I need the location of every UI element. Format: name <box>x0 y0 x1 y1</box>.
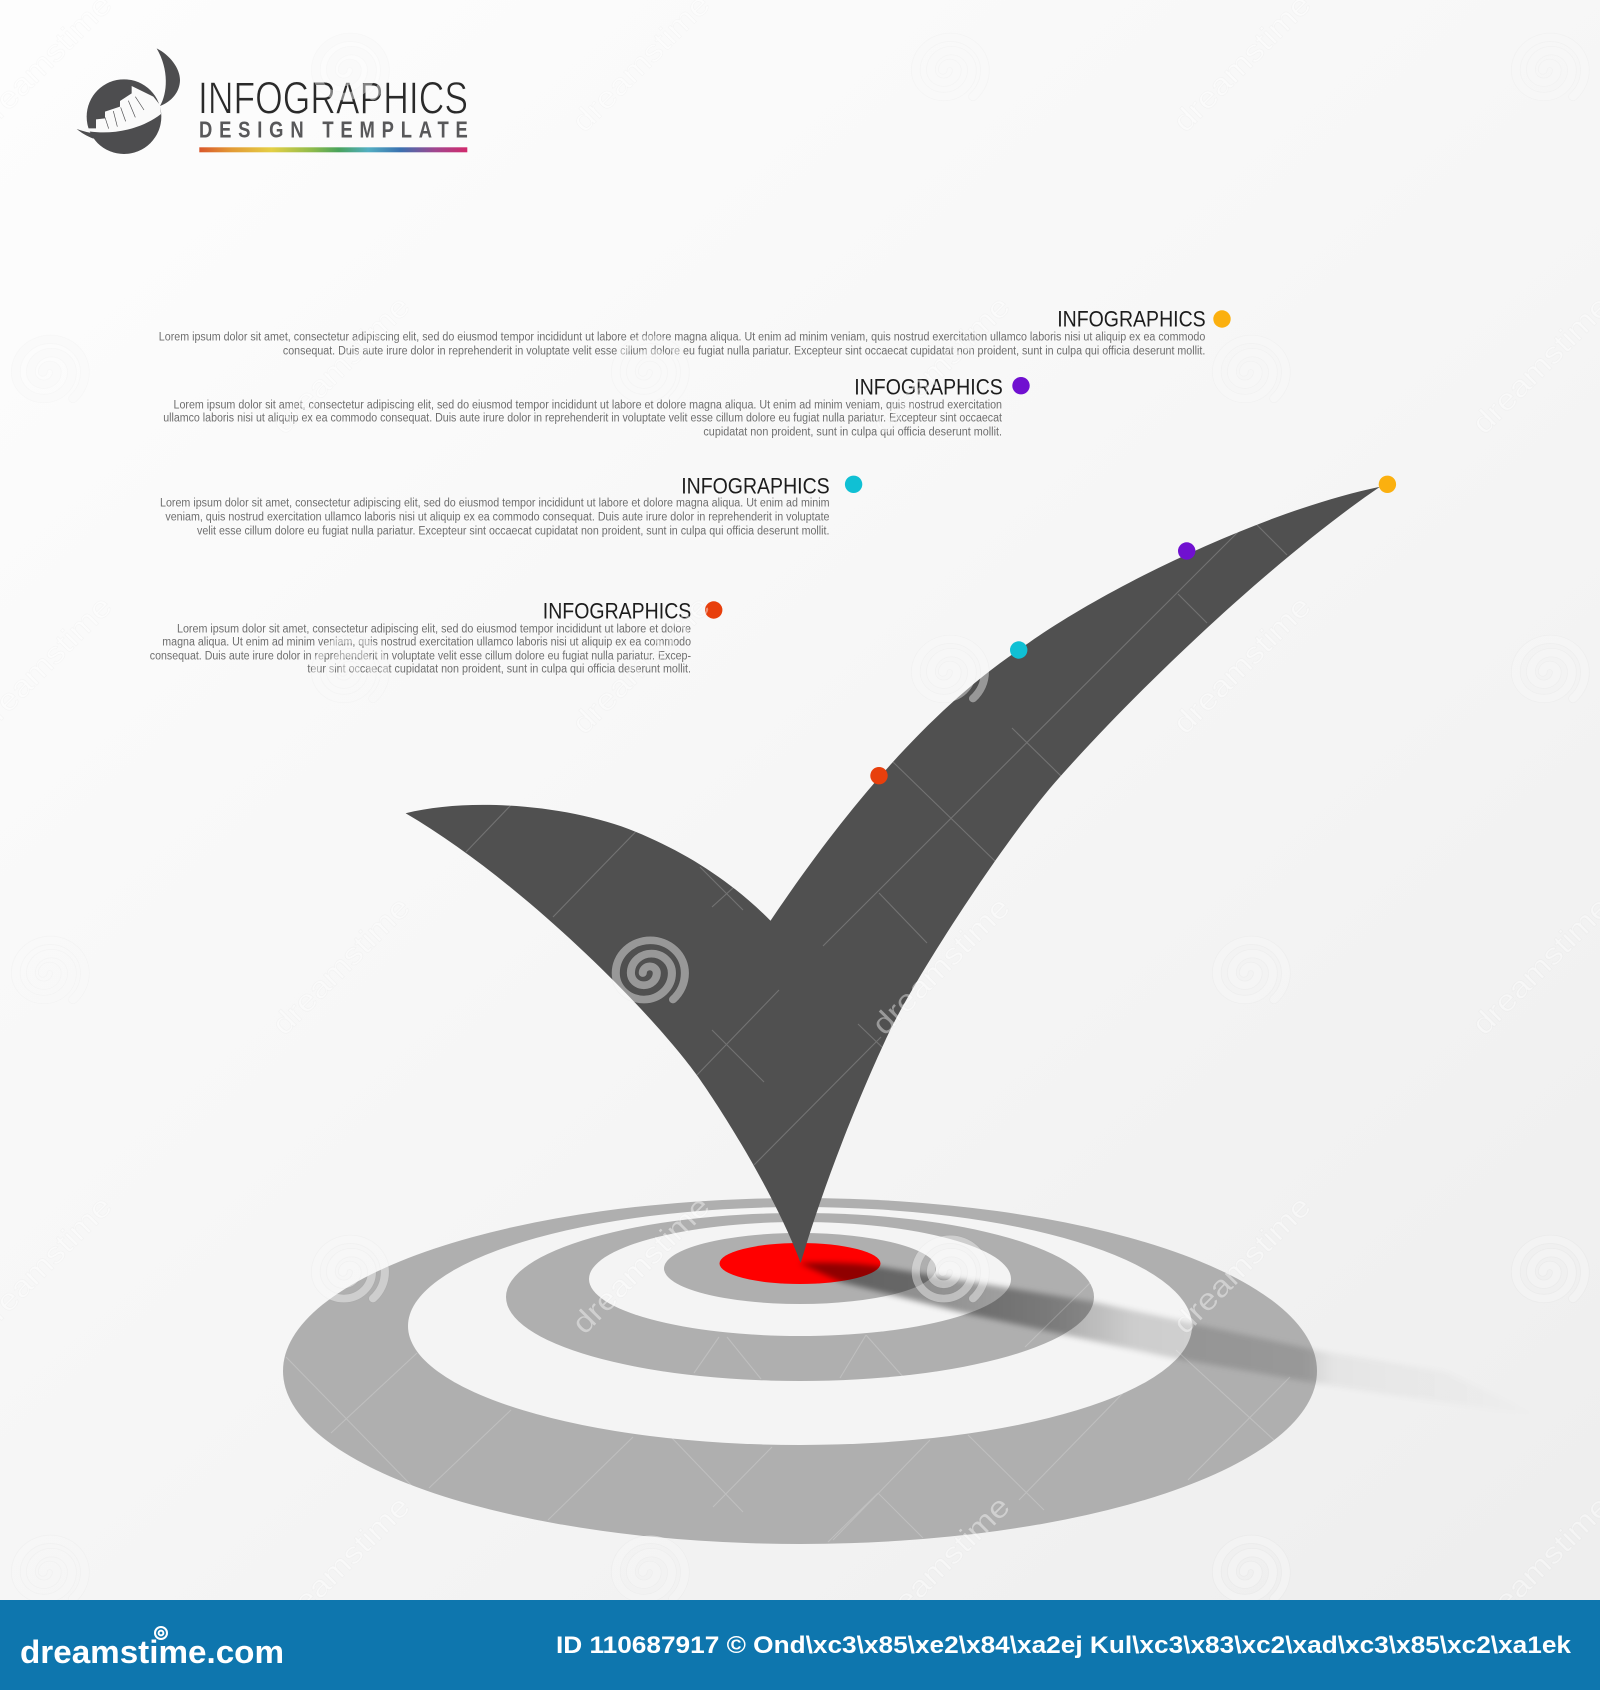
watermark wordmarks: dreamstime <box>266 891 417 1042</box>
label 2: purple <box>163 374 1030 439</box>
cast shadow of check mark <box>799 1263 1543 1417</box>
label 2: purple: ullamco laboris nisi ut aliquip ex ea commodo consequat. Duis aute irure dolor in reprehenderit in voluptate velit esse cillum dolore eu fugiat nulla pariatur. Excepteur sint occaecat <box>163 413 1003 425</box>
footer spiral icon <box>155 1627 167 1639</box>
label 3: teal <box>160 473 862 537</box>
footer image id: ID 110687917 © Ond\xc3\x85\xe2\x84\xa2ej Kul\xc3\x83\xc2\xad\xc3\x85\xc2\xa1ek <box>556 1632 1572 1659</box>
watermark wordmarks: dreamstime <box>266 290 417 441</box>
watermark wordmarks: dreamstime <box>566 590 717 741</box>
logo title <box>198 72 468 143</box>
rainbow underline <box>199 147 467 152</box>
watermark wordmarks: dreamstime <box>866 891 1017 1042</box>
label 1: yellow <box>159 307 1231 357</box>
logo title: DESIGN TEMPLATE <box>199 117 468 143</box>
watermark lines <box>286 523 1290 1542</box>
label 1: yellow: INFOGRAPHICS <box>1057 307 1206 332</box>
label 4: red: INFOGRAPHICS <box>543 598 691 623</box>
label 4: red <box>150 598 722 676</box>
label 2: purple: cupidatat non proident, sunt in culpa qui officia deserunt mollit. <box>703 427 1002 439</box>
watermark wordmarks: dreamstime <box>1466 290 1600 441</box>
watermark wordmarks: dreamstime <box>866 1490 1017 1641</box>
label 2: purple: INFOGRAPHICS <box>854 374 1003 399</box>
logo icon <box>77 48 180 154</box>
watermark wordmarks: dreamstime <box>1167 590 1318 741</box>
watermark wordmarks: dreamstime <box>566 0 717 139</box>
label 4: red: magna aliqua. Ut enim ad minim veniam, quis nostrud exercitation ullamco laboris nisi ut aliquip ex ea commodo <box>162 637 691 649</box>
watermark wordmarks: dreamstime <box>1167 1190 1318 1341</box>
watermark wordmarks: dreamstime <box>1466 1490 1600 1641</box>
label 3: teal: velit esse cillum dolore eu fugiat nulla pariatur. Excepteur sint occaecat cupidatat non proident, sunt in culpa qui officia deserunt mollit. <box>197 525 830 537</box>
watermark wordmarks: dreamstime <box>266 1490 417 1641</box>
label 4: red: teur sint occaecat cupidatat non proident, sunt in culpa qui officia deserunt mollit. <box>307 664 691 676</box>
label 1: yellow: consequat. Duis aute irure dolor in reprehenderit in voluptate velit esse cillum dolore eu fugiat nulla pariatur. Excepteur sint occaecat cupidatat non proident, sunt in culpa qui officia deserunt mollit. <box>283 345 1205 357</box>
watermark wordmarks: dreamstime <box>1466 891 1600 1042</box>
bullseye <box>720 1243 880 1284</box>
label 4: red: consequat. Duis aute irure dolor in reprehenderit in voluptate velit esse cillum dolore eu fugiat nulla pariatur. Excep- <box>150 650 691 662</box>
footer logo text: dreamstime.com <box>20 1634 284 1670</box>
watermark wordmarks: dreamstime <box>1167 0 1318 139</box>
label 3: teal: veniam, quis nostrud exercitation ullamco laboris nisi ut aliquip ex ea commodo consequat. Duis aute irure dolor in reprehenderit in voluptate <box>165 512 829 524</box>
check mark <box>406 487 1380 1263</box>
watermark wordmarks: dreamstime <box>566 1190 717 1341</box>
label 3: teal: INFOGRAPHICS <box>681 473 830 498</box>
footer band <box>0 1600 1600 1690</box>
logo title: INFOGRAPHICS <box>198 72 468 124</box>
check mark point dots <box>870 476 1396 784</box>
label 2: purple: Lorem ipsum dolor sit amet, consectetur adipiscing elit, sed do eiusmod tempor incididunt ut labore et dolore magna aliqua. Ut enim ad minim veniam, quis nostrud exercitation <box>174 399 1002 411</box>
label 3: teal: Lorem ipsum dolor sit amet, consectetur adipiscing elit, sed do eiusmod tempor incididunt ut labore et dolore magna aliqua. Ut enim ad minim <box>160 498 830 510</box>
watermark wordmarks: dreamstime <box>866 290 1017 441</box>
label 1: yellow: Lorem ipsum dolor sit amet, consectetur adipiscing elit, sed do eiusmod tempor incididunt ut labore et dolore magna aliqua. Ut enim ad minim veniam, quis nostrud exercitation ullamco laboris nisi ut aliquip ex ea commodo <box>159 332 1205 344</box>
target rings <box>283 1198 1317 1544</box>
label 4: red: Lorem ipsum dolor sit amet, consectetur adipiscing elit, sed do eiusmod tempor incididunt ut labore et dolore <box>177 623 691 635</box>
